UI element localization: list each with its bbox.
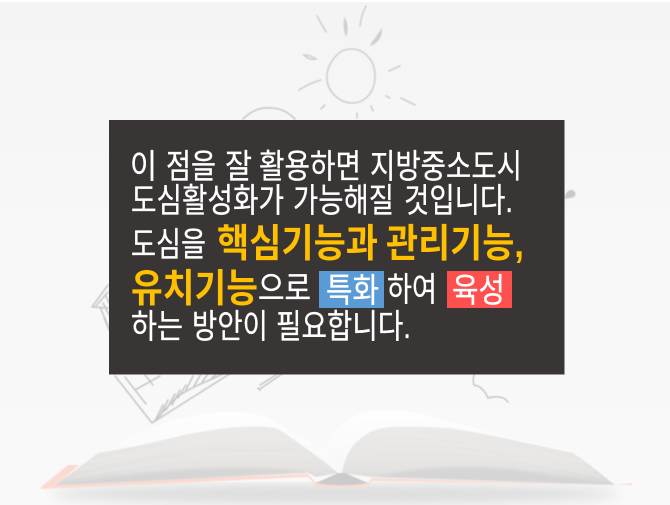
book cover <box>41 465 632 489</box>
right page block <box>342 427 615 485</box>
text line 2: 가능해질 <box>293 183 394 220</box>
page edge lines <box>70 434 600 478</box>
panel: dark message box <box>109 120 564 374</box>
highlight: core and management functions <box>217 223 524 266</box>
lower page shade <box>70 467 600 484</box>
text line 1: 이 <box>130 149 157 186</box>
text: line 4 verb: 하여 <box>387 272 437 309</box>
icon: small blot at panel right <box>565 190 576 199</box>
text line 3 lead: 도심을 <box>131 227 206 264</box>
text line 1: 잘 <box>225 149 252 186</box>
text line 5 <box>131 309 411 346</box>
badge: specialization: 특화 <box>326 273 379 310</box>
text line 1: 지방중소도시 <box>370 149 522 186</box>
highlight: core and management functions: 핵심기능과 <box>217 223 378 266</box>
highlight: attraction function: 유치기능 <box>131 268 258 311</box>
illustration: open book <box>41 410 632 504</box>
text line 2: 것입니다. <box>404 183 513 220</box>
left page block <box>56 426 338 485</box>
book shadow <box>50 484 620 504</box>
text line 5: 필요합니다. <box>276 309 411 346</box>
text line 2 <box>131 183 513 220</box>
text line 5: 방안이 <box>192 309 268 346</box>
text line 2: 도심활성화가 <box>131 183 284 220</box>
left page top sheet <box>60 412 338 484</box>
text line 5: 하는 <box>131 309 183 346</box>
book spine <box>316 473 368 485</box>
highlight: core and management functions: 관리기능, <box>386 223 524 266</box>
icon: sun doodle <box>299 6 415 118</box>
text line 1: 점을 <box>166 149 216 186</box>
badge: nurturing: 육성 <box>452 273 505 310</box>
right page top sheet <box>325 410 611 482</box>
text line 1: 활용하면 <box>259 149 361 186</box>
text line 1 <box>130 149 522 186</box>
text: line 4 particle: 으로 <box>258 271 311 308</box>
icon: sketch of building behind panel <box>92 108 508 423</box>
